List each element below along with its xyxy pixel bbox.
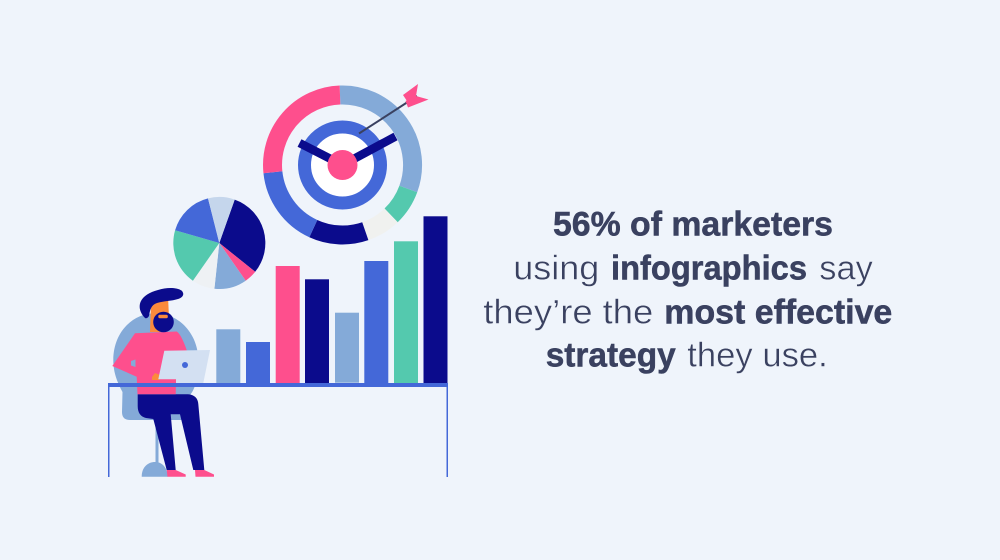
chair bbox=[113, 313, 198, 477]
person at laptop bbox=[112, 288, 214, 477]
elbow crease bbox=[131, 360, 136, 367]
headline text: strategy bbox=[546, 337, 676, 375]
target donut chart bbox=[273, 84, 428, 235]
head bbox=[150, 296, 169, 332]
arrow bbox=[359, 84, 428, 134]
headline text: they’re the bbox=[483, 293, 653, 331]
legs bbox=[138, 394, 204, 470]
headline text: using bbox=[513, 249, 599, 287]
shoes bbox=[167, 470, 214, 477]
headline text bbox=[483, 206, 892, 375]
desk bbox=[108, 383, 448, 477]
torso and arm bbox=[112, 332, 187, 394]
headline text: say bbox=[819, 249, 873, 287]
headline text: infographics bbox=[611, 249, 807, 287]
headline text: most effective bbox=[664, 293, 892, 331]
target hands bbox=[300, 136, 396, 165]
hair bbox=[140, 288, 183, 318]
headline text: they use. bbox=[687, 337, 828, 375]
hand bbox=[152, 373, 160, 380]
laptop bbox=[158, 350, 210, 383]
beard bbox=[153, 312, 174, 332]
headline text: 56% of marketers bbox=[553, 206, 833, 244]
pie chart bbox=[173, 197, 265, 289]
bar chart bbox=[216, 216, 448, 383]
